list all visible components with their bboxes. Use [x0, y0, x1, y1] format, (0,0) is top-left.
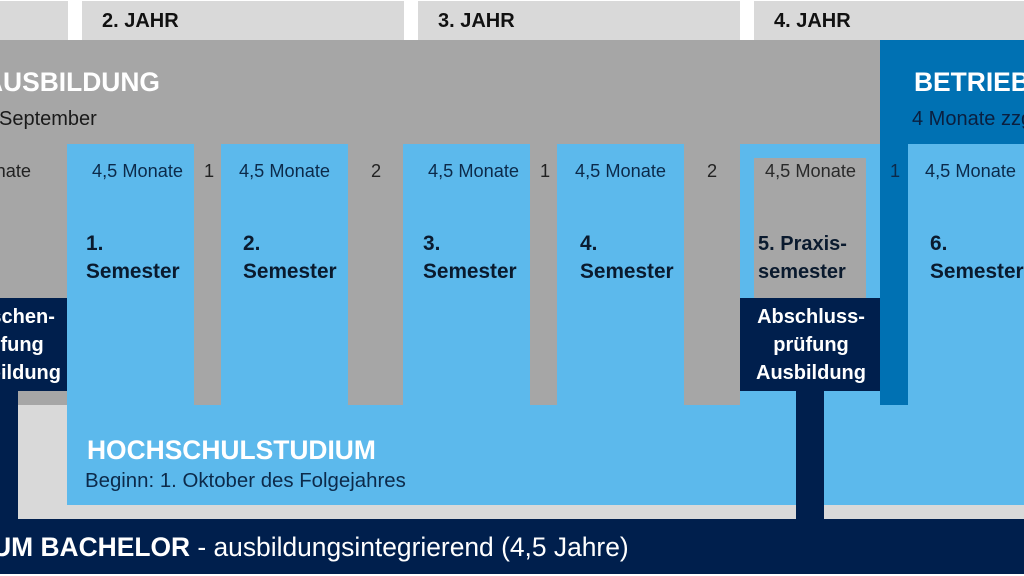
text: Zwischenprüfung Ausbildung	[0, 306, 61, 384]
text: 4. Semester: 4.	[580, 232, 597, 255]
heading: Hochschulstudium: HOCHSCHULSTUDIUM	[87, 435, 376, 465]
label: 4,5 Monate 6: 4,5 Monate	[925, 161, 1016, 181]
text: Abschlussprüfung Ausbildung: prüfung	[773, 334, 849, 356]
panel: Ausbildung	[0, 40, 880, 405]
label: break 2 year 3: 2	[707, 161, 717, 181]
text: 1. Semester: 1.	[86, 232, 103, 255]
text: 3. Semester: Semester	[423, 260, 517, 283]
text: 4. Semester: Semester	[580, 260, 674, 283]
text: start month: September	[0, 108, 97, 130]
panel: Hochschulstudium	[67, 405, 1024, 505]
text: Abschlussprüfung Ausbildung: Ausbildung	[756, 362, 866, 384]
text: 3. Semester	[423, 232, 517, 283]
text: Abschlussprüfung Ausbildung	[756, 306, 866, 384]
text: 1. Semester: Semester	[86, 260, 180, 283]
panel: 2. Semester	[221, 144, 348, 405]
label: 4,5 Monate 5: 4,5 Monate	[765, 161, 856, 181]
text: 2. Semester	[243, 232, 337, 283]
year bar: 1. Jahr	[0, 1, 68, 40]
text: 3. Semester: 3.	[423, 232, 440, 255]
label: 4,5 Monate 2: 4,5 Monate	[239, 161, 330, 181]
text: 1. Semester	[86, 232, 180, 283]
text: Abschlussprüfung Ausbildung: Abschluss-	[757, 306, 865, 328]
text: 5. Praxissemester: 5. Praxis-	[758, 233, 847, 255]
year bar: 3. Jahr: 3. JAHR	[438, 10, 515, 32]
year bar: 2. Jahr	[82, 1, 404, 40]
text: 6. Semester: Semester	[930, 260, 1024, 283]
year bar: 4. Jahr: 4. JAHR	[774, 10, 851, 32]
panel: Praxissemester	[754, 158, 866, 298]
label: break 1 year 3: 1	[540, 161, 550, 181]
year bar: 3. Jahr	[418, 1, 740, 40]
label: 4,5 Monate 4: 4,5 Monate	[575, 161, 666, 181]
label: break 1: 1	[204, 161, 214, 181]
text: 2. Semester: Semester	[243, 260, 337, 283]
bottom bar: Bachelor	[0, 519, 1024, 574]
text: 5. Praxissemester: semester	[758, 261, 846, 283]
text: 2. Semester: 2.	[243, 232, 260, 255]
connector: right stem	[796, 391, 824, 519]
panel: light grey background	[18, 405, 1024, 519]
label: break 2: 2	[371, 161, 381, 181]
panel: 6. Semester	[908, 144, 1024, 505]
box: Abschlussprüfung	[740, 298, 880, 391]
label: break 1 year 4: 1	[890, 161, 900, 181]
text: 6. Semester	[930, 232, 1024, 283]
panel: 5. Semester frame	[740, 144, 880, 405]
text: Beginn: Beginn: 1. Oktober des Folgejahres	[85, 470, 406, 492]
connector: left stem	[0, 391, 18, 519]
panel: 1. Semester	[67, 144, 194, 405]
text: 5. Praxissemester	[758, 233, 847, 283]
label: 4,5 Monate 1: 4,5 Monate	[92, 161, 183, 181]
year bar: 4. Jahr	[754, 1, 1024, 40]
panel: Betrieb	[880, 40, 1024, 405]
panel: 4. Semester	[557, 144, 684, 405]
year bar: 2. Jahr: 2. JAHR	[102, 10, 179, 32]
box: Zwischenprüfung	[0, 298, 67, 391]
text: 4. Semester	[580, 232, 674, 283]
label: 4,5 Monate 3: 4,5 Monate	[428, 161, 519, 181]
panel: 3. Semester	[403, 144, 530, 405]
text: 6. Semester: 6.	[930, 232, 947, 255]
